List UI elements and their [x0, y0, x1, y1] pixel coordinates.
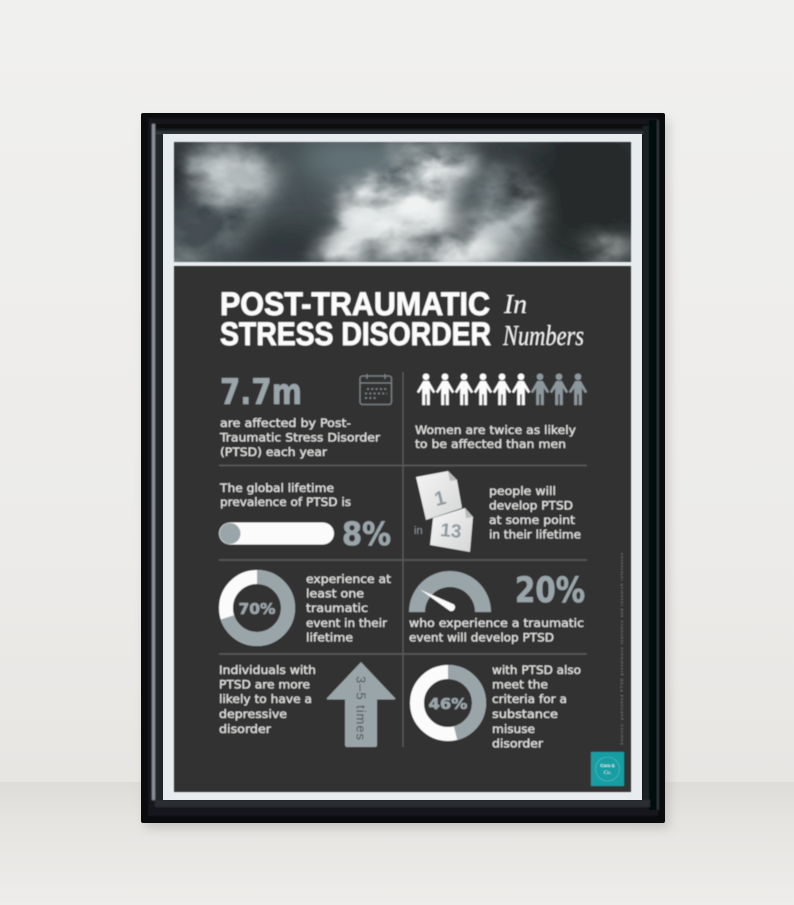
- text: people will develop PTSD: at some point: [489, 513, 576, 527]
- floor: [0, 782, 794, 905]
- title: STRESS DISORDER: [220, 316, 491, 352]
- text: experience traumatic event: experience at: [306, 572, 392, 586]
- text: people will develop PTSD: develop PTSD: [489, 498, 573, 512]
- logo badge: Cara &: [600, 763, 615, 768]
- text: who experience a traumatic event: event will develop PTSD: [409, 630, 554, 644]
- poster frame: [141, 113, 665, 823]
- stat: 20%: 20%: [515, 571, 585, 611]
- text: depressive disorder: disorder: [219, 722, 271, 736]
- icon: 1 in 13 papers: 1: [432, 487, 448, 511]
- text: substance misuse: substance: [492, 707, 558, 721]
- title: [220, 286, 491, 352]
- text: people will develop PTSD: in their lifetime: [489, 528, 581, 542]
- stat: 7.7m: Traumatic Stress Disorder: [219, 430, 380, 444]
- text: depressive disorder: PTSD are more: [219, 678, 310, 692]
- text: experience traumatic event: event in their: [306, 616, 387, 630]
- gauge chart: [409, 571, 491, 612]
- donut chart: 46%: [417, 672, 479, 734]
- text: depressive disorder: likely to have a: [219, 692, 312, 706]
- arrow: 3-5 times: 3–5 times: [354, 676, 368, 740]
- text: experience traumatic event: [306, 572, 392, 644]
- title: POST-TRAUMATIC: [220, 286, 490, 322]
- text: substance misuse: meet the: [492, 678, 548, 692]
- vertical source text: Sources: published PTSD prevalence statistics and research references: [619, 553, 624, 745]
- text: experience traumatic event: least one: [306, 586, 364, 600]
- text: global lifetime prevalence: prevalence of PTSD is: [220, 495, 351, 509]
- stat: 8%: 8%: [342, 515, 391, 553]
- icon: row of people: [417, 373, 587, 405]
- text: who experience a traumatic event: who experience a traumatic: [409, 616, 584, 630]
- frame shadow: [145, 120, 669, 828]
- text: people will develop PTSD: people will: [489, 484, 556, 498]
- stat: 7.7m: are affected by Post-: [220, 416, 351, 430]
- text: global lifetime prevalence: The global lifetime: [219, 481, 334, 495]
- text: people will develop PTSD: [489, 484, 581, 542]
- text: substance misuse: with PTSD also: [492, 663, 581, 677]
- stat: 7.7m: 7.7m: [220, 372, 302, 413]
- subtitle script: [502, 289, 584, 352]
- text: experience traumatic event: traumatic: [306, 601, 368, 615]
- logo badge: Co.: [604, 770, 611, 776]
- text: women twice as likely: [415, 423, 576, 451]
- progress bar 8%: [219, 522, 334, 544]
- text: substance misuse: criteria for a: [492, 692, 567, 706]
- text: women twice as likely: to be affected than men: [415, 437, 566, 451]
- text: global lifetime prevalence: [219, 481, 351, 509]
- icon: 1 in 13 papers: [414, 471, 473, 552]
- text: depressive disorder: [219, 663, 316, 736]
- text: substance misuse: misuse: [492, 722, 535, 736]
- donut chart: 46%: 46%: [428, 695, 468, 713]
- text: substance misuse: [492, 663, 581, 750]
- stat: 7.7m: [219, 372, 380, 459]
- arrow: 3-5 times: [327, 662, 395, 747]
- subtitle script: Numbers: [502, 320, 584, 352]
- icon: 1 in 13 papers: 13: [439, 520, 462, 543]
- icon: calendar: [360, 374, 392, 404]
- subtitle script: In: [503, 289, 527, 319]
- white mat: [163, 134, 642, 800]
- icon: 1 in 13 papers: in: [414, 525, 423, 537]
- text: women twice as likely: Women are twice as likely: [415, 423, 576, 437]
- text: substance misuse: disorder: [492, 736, 543, 750]
- stat: 7.7m: (PTSD) each year: [220, 445, 327, 459]
- text: depressive disorder: depressive: [219, 707, 287, 721]
- dividers: [219, 372, 587, 747]
- text: depressive disorder: Individuals with: [219, 663, 316, 677]
- donut chart: 70%: [226, 577, 288, 639]
- text: who experience a traumatic event: [409, 616, 584, 644]
- donut chart: 70%: 70%: [238, 600, 276, 618]
- text: experience traumatic event: lifetime: [306, 630, 353, 644]
- storm cloud photo banner: [173, 141, 632, 263]
- panel: poster background: [174, 266, 631, 792]
- logo badge: [591, 752, 624, 786]
